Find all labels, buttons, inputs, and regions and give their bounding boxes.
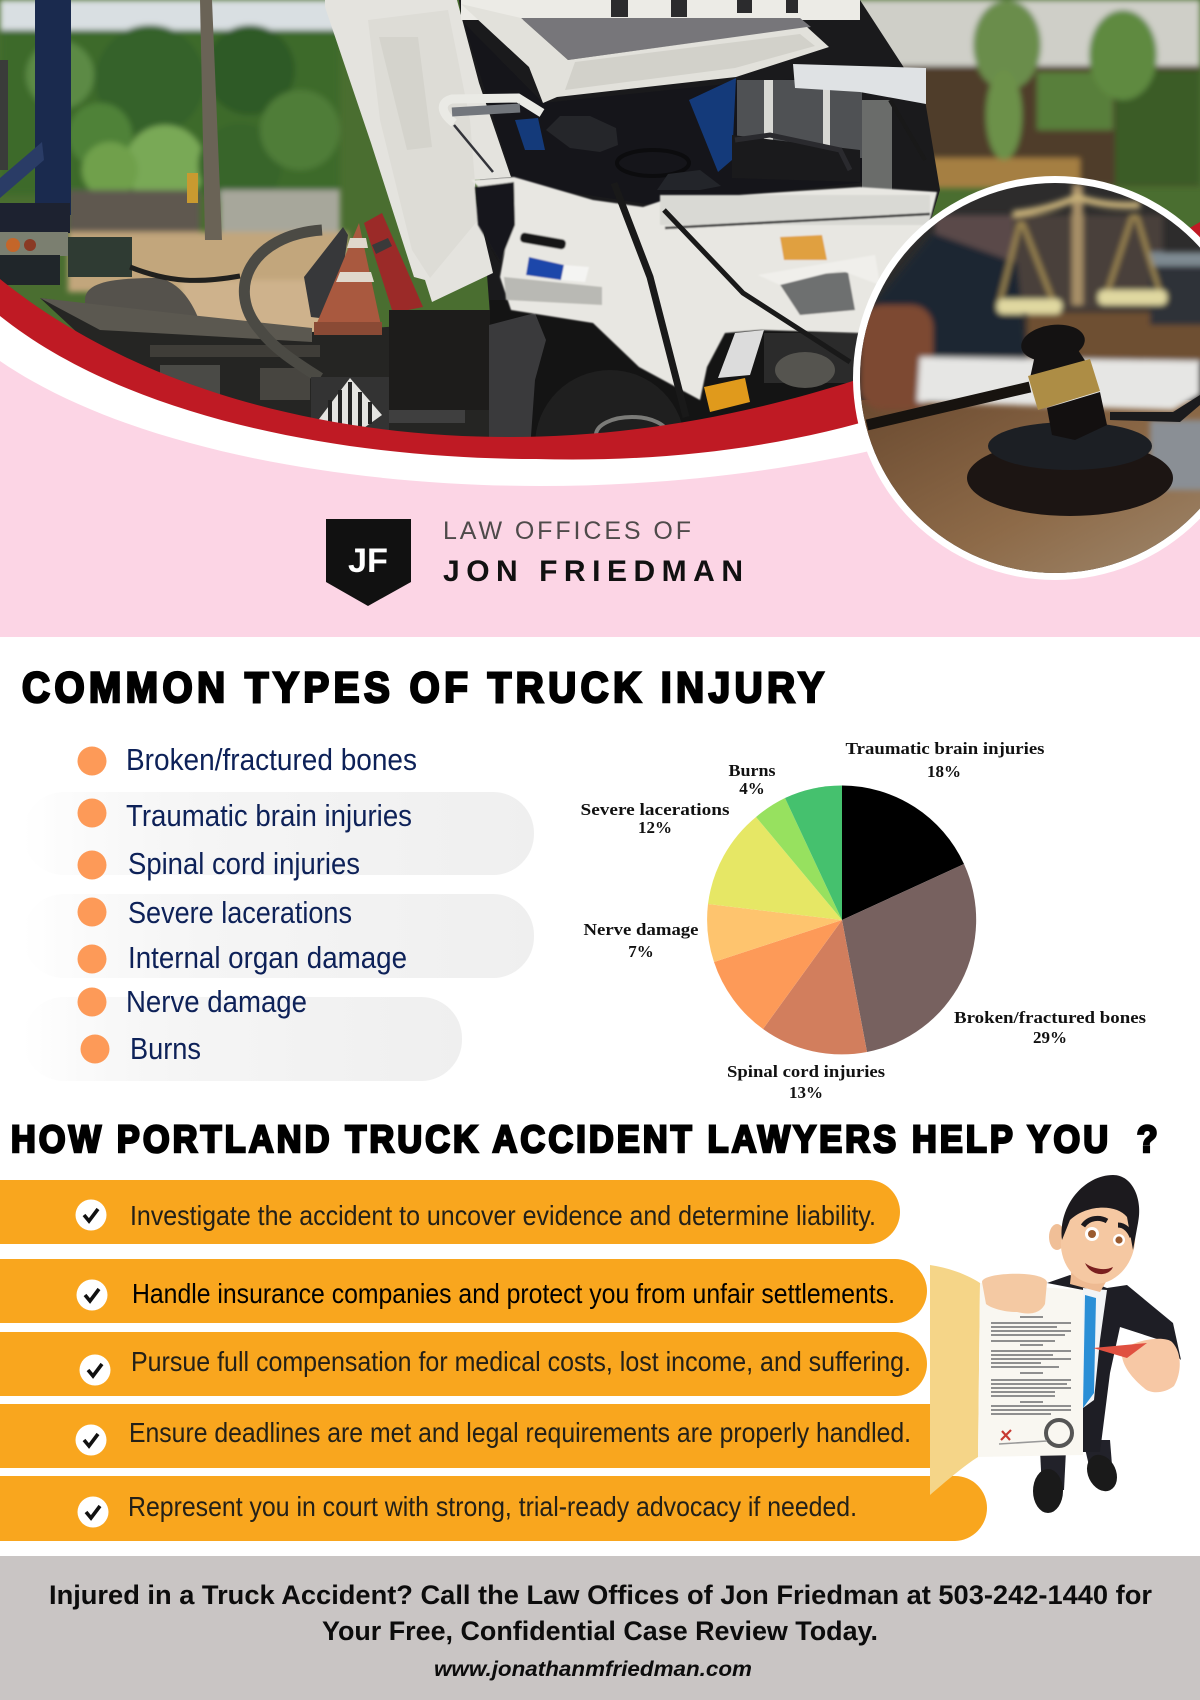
legs and shoes [1033,1440,1123,1513]
list item: nerve damage: Nerve damage [126,984,307,1019]
bar 1: investigate: Investigate the accident to uncover evidence and determine liability. [130,1200,876,1231]
photo background: trees, fence and ground [0,0,1200,340]
list item: burns [80,1031,201,1066]
hazard sign [311,377,465,437]
slice: internal organ damage 10% [714,920,842,1029]
folder [930,1265,980,1495]
slice: nerve damage 7% [707,904,842,962]
footer line 1: Injured in a Truck Accident? Call the Law Offices of Jon Friedman at 503-242-1440 for [49,1580,1152,1610]
head [1049,1175,1142,1292]
truck front fender [471,177,937,400]
icon: JF shield [326,519,411,606]
bar 1: investigate [0,1180,900,1244]
hand with pen [1093,1339,1180,1392]
bar 4: deadlines: Ensure deadlines are met and legal requirements are properly handled. [129,1417,911,1448]
label: burns: 4% [739,779,765,798]
panel: footer call to action [0,1556,1200,1700]
logo text: jon friedman: JON FRIEDMAN [443,555,743,588]
headlight parts [704,330,764,412]
bar 3: compensation: Pursue full compensation for medical costs, lost income, and suffering. [131,1346,911,1377]
label: severe lacerations: Severe lacerations [580,800,730,819]
fire extinguisher [364,213,423,313]
label: burns: Burns [728,761,776,780]
chassis and culvert [40,230,545,450]
label: burns [728,761,776,798]
icon: JF shield: JF [348,542,388,580]
panel: hero header with truck photo and logo [0,0,1200,637]
pie chart [580,739,1146,1102]
blue crane post and utility pole [0,0,222,285]
document [978,1283,1083,1457]
swoosh: red band [0,222,1200,637]
label: broken bones [954,1008,1146,1047]
label: nerve damage: Nerve damage [584,920,699,939]
list item: traumatic brain injuries: Traumatic brain injuries [126,798,412,833]
footer line 2: Your Free, Confidential Case Review Today. [322,1616,878,1646]
truck hood flap [461,0,926,104]
slice: broken bones 29% [842,864,976,1052]
slice: spinal cord 13% [763,920,867,1054]
swoosh: white band [0,240,1200,637]
label: traumatic brain injuries: Traumatic brain injuries [846,739,1045,758]
panel: how lawyers help list [0,1180,987,1541]
cables [614,100,925,417]
dark base behind truck [459,0,940,450]
logo [326,517,743,606]
background pill 1 [23,792,534,875]
bar 3: compensation [0,1332,927,1396]
bar 5: court [0,1476,987,1541]
list item: spinal cord injuries: Spinal cord injuries [128,846,360,881]
panel: injury list [23,742,534,1081]
slice: severe lacerations 12% [708,817,842,920]
logo text: law offices of: LAW OFFICES OF [443,517,691,545]
cab interior [464,23,892,205]
footer website: www.jonathanmfriedman.com [434,1658,752,1681]
bar 5: court: Represent you in court with strong, trial-ready advocacy if needed. [128,1491,857,1522]
hand holding document [982,1274,1047,1314]
photo: gavel in white circle [850,170,1200,590]
slice: traumatic brain injuries 18% [842,786,964,920]
label: spinal cord injuries [727,1062,885,1102]
label: severe lacerations: 12% [638,818,672,837]
bar 2: insurance [0,1259,927,1323]
heading: common types of truck injury: COMMON TYPES OF TRUCK INJURY [22,663,824,711]
mirrors and steering wheel [443,98,721,190]
list item: internal organ damage: Internal organ damage [128,940,407,975]
background pill 2 [23,894,534,978]
bar 2: insurance: Handle insurance companies and protect you from unfair settlements. [132,1278,895,1309]
list item: broken bones: Broken/fractured bones [126,742,417,777]
traffic cone [314,223,382,335]
list item: burns: Burns [130,1031,201,1066]
slice: burns 4% [756,798,842,920]
background pill 3 [23,997,462,1081]
label: traumatic brain injuries: 18% [927,762,961,781]
list item: severe lacerations: Severe lacerations [128,895,352,930]
label: broken bones: Broken/fractured bones [954,1008,1146,1027]
label: spinal cord injuries: Spinal cord injuries [727,1062,885,1081]
label: nerve damage [584,920,699,961]
truck engine block [389,310,499,410]
swoosh: pink background curve [0,330,1200,637]
bar 4: deadlines [0,1404,935,1468]
label: traumatic brain injuries [846,739,1045,781]
suit [1047,1275,1181,1452]
slice: remaining 7% [785,785,842,920]
dark panel behind cone [304,227,348,320]
heading: how lawyers help: HOW PORTLAND TRUCK ACCIDENT LAWYERS HELP YOU ? [11,1117,1158,1160]
illustration: lawyer holding document [930,1175,1181,1513]
label: nerve damage: 7% [628,942,654,961]
truck door [325,0,511,302]
wheel and mudguard [489,300,880,520]
photo: crashed truck [0,0,1200,520]
label: broken bones: 29% [1033,1028,1067,1047]
label: spinal cord injuries: 13% [789,1083,823,1102]
label: severe lacerations [580,800,730,837]
